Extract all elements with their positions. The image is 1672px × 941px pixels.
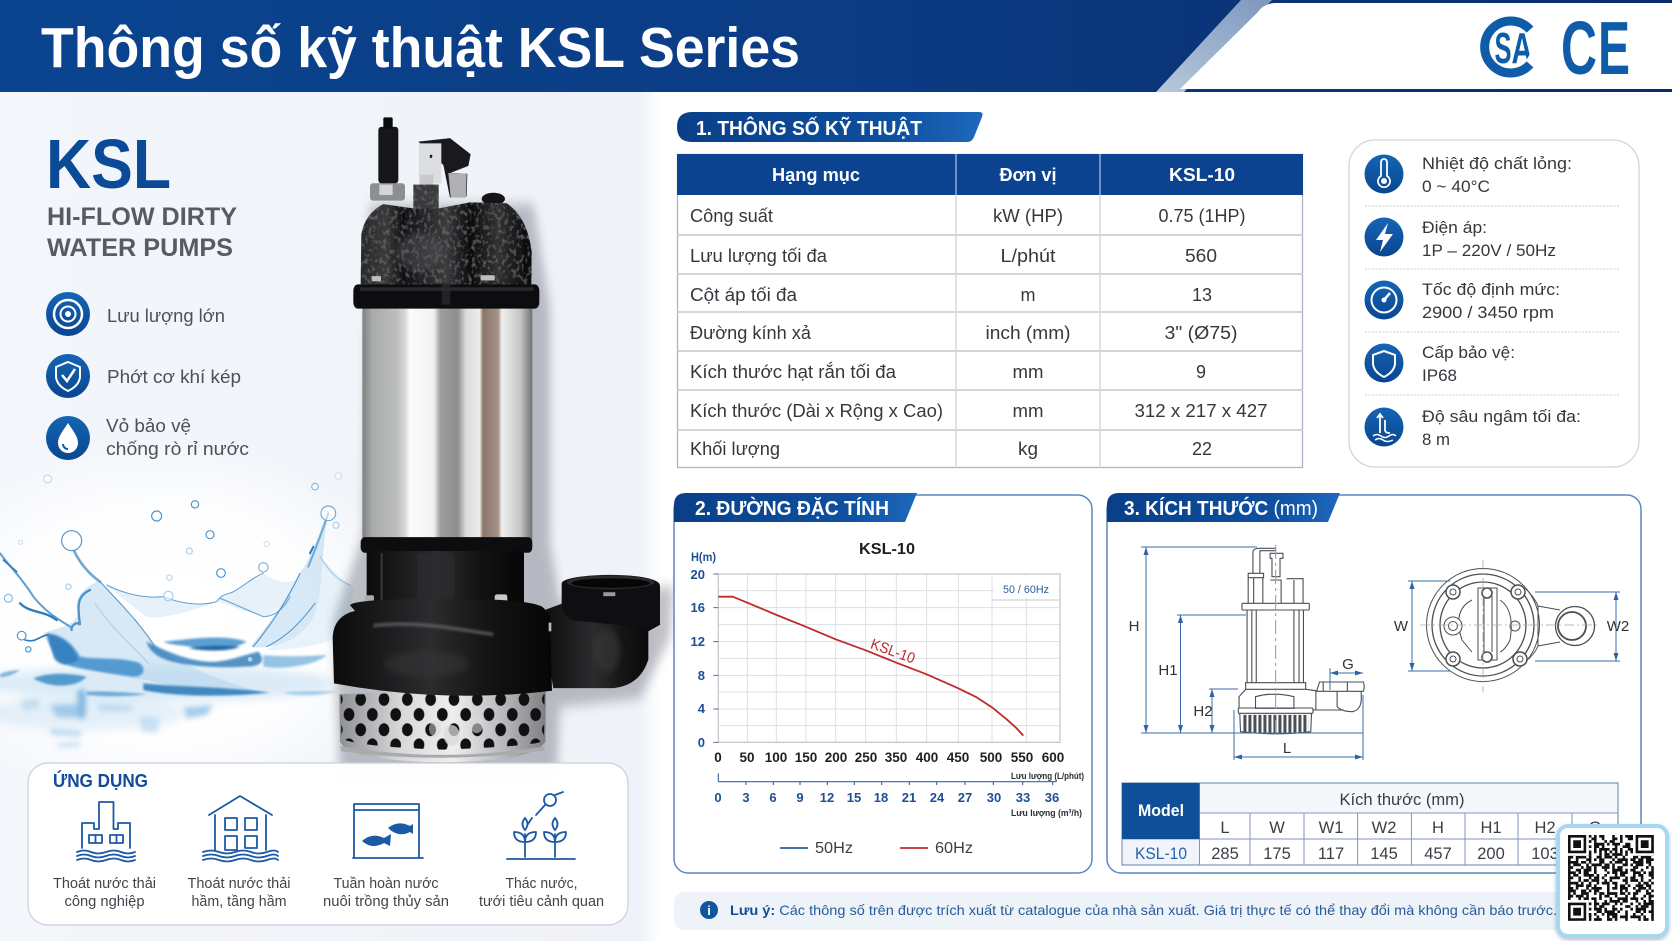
droplets [4, 473, 342, 662]
feature: double mechanical seal [46, 354, 241, 398]
table: dimensions: W1 [1319, 819, 1343, 837]
table rows: L/phút [1000, 246, 1056, 266]
application: industrial wastewater: công nghiệp [64, 893, 144, 910]
panel: applications [28, 763, 628, 925]
product subtitle: WATER PUMPS [47, 234, 233, 262]
pump photo illustration [333, 117, 673, 781]
note bar: Lưu ý: Các thông số trên được trích xuất từ catalogue của nhà sản xuất. Giá trị thực tế có thể thay đổi mà không cần báo trước. [730, 902, 1557, 918]
line chart: head versus flow: 50 [739, 750, 755, 765]
table rows: Công suất [690, 206, 773, 226]
table rows: Đường kính xả [690, 323, 812, 343]
table header [772, 165, 1235, 185]
water reflections [20, 690, 213, 747]
chart legend: 50Hz [815, 840, 853, 857]
line chart: head versus flow [691, 550, 1084, 819]
diagram: side view with dimensions: H1 [1158, 662, 1178, 679]
spec: protection class: IP68 [1422, 366, 1457, 385]
perforated strainer [339, 685, 546, 762]
diagram: side view with dimensions: H2 [1193, 703, 1213, 720]
table header: Hạng mục [772, 165, 860, 185]
table: dimensions: L [1220, 819, 1230, 837]
application: basement drainage: hầm, tầng hầm [192, 893, 286, 910]
table rows: 0.75 (1HP) [1158, 206, 1246, 226]
table rows: Kích thước hạt rắn tối đa [690, 361, 897, 382]
spec: liquid temperature: 0 ~ 40°C [1422, 177, 1490, 196]
table rows: mm [1012, 362, 1044, 382]
line chart: head versus flow: 30 [987, 790, 1001, 805]
application: irrigation and landscape: tưới tiêu cảnh quan [479, 893, 604, 910]
feature: leak-proof casing: chống rò rỉ nước [106, 439, 249, 459]
section 1 heading tab [677, 112, 983, 142]
application: industrial wastewater [53, 802, 156, 910]
table rows: 560 [1185, 246, 1217, 266]
note bar [674, 892, 1584, 930]
table rows: Khối lượng [690, 439, 780, 459]
line chart: head versus flow: 0 [698, 735, 705, 750]
spec: maximum submersion depth: Độ sâu ngâm tối đa: [1422, 407, 1581, 426]
line chart: head versus flow: 24 [930, 790, 945, 805]
line chart: head versus flow: 4 [698, 701, 706, 716]
panel: operating conditions [1349, 140, 1639, 467]
application: irrigation and landscape [479, 792, 604, 910]
line chart: head versus flow: 0 [714, 790, 722, 805]
table rows [690, 206, 1268, 459]
icon: CSA certification mark [1485, 21, 1532, 73]
table: dimensions: H [1432, 819, 1444, 837]
line chart: head versus flow: 3 [742, 790, 750, 805]
icon: CSA certification mark: S [1494, 24, 1512, 73]
section 3 heading tab: 3. KÍCH THƯỚC (mm) [1124, 496, 1318, 520]
QR code card [1558, 826, 1667, 936]
motor dome [361, 193, 532, 286]
line chart: head versus flow: 150 [795, 750, 817, 765]
table: dimensions: W2 [1372, 819, 1396, 837]
line chart: head versus flow: 50 / 60Hz [1003, 584, 1049, 596]
line chart: head versus flow: 550 [1011, 750, 1033, 765]
spec: protection class: Cấp bảo vệ: [1422, 343, 1515, 362]
product subtitle: HI-FLOW DIRTY [47, 203, 237, 231]
line chart: head versus flow: 21 [902, 790, 916, 805]
spec: maximum submersion depth: 8 m [1422, 430, 1450, 449]
line chart: head versus flow: 0 [714, 750, 722, 765]
feature: high flow: Lưu lượng lớn [107, 306, 225, 326]
icon: CE certification mark: C [1561, 6, 1597, 90]
feature: high flow [46, 292, 225, 336]
panel: dimensions [1107, 493, 1641, 873]
table: dimensions [1122, 783, 1618, 865]
table: dimensions: 117 [1318, 845, 1344, 863]
feature: leak-proof casing [46, 416, 249, 460]
table rows: Cột áp tối đa [690, 285, 798, 305]
line chart: head versus flow: 450 [947, 750, 969, 765]
table: dimensions: G [1589, 819, 1601, 837]
spec: voltage: 1P – 220V / 50Hz [1422, 241, 1556, 260]
line chart: head versus flow: Lưu lượng (L/phút) [1011, 771, 1084, 782]
line chart: head versus flow: 9 [796, 790, 804, 805]
line chart: head versus flow: 36 [1045, 790, 1059, 805]
table: dimensions: 457 [1424, 845, 1452, 863]
top flange [353, 282, 539, 309]
feature: double mechanical seal: Phớt cơ khí kép [107, 367, 241, 387]
applications heading: ỨNG DỤNG [53, 770, 148, 791]
application: aquaculture: Tuần hoàn nước [334, 875, 439, 892]
spec: voltage [1364, 218, 1556, 260]
line chart: head versus flow: 350 [885, 750, 907, 765]
steel motor housing [362, 304, 532, 540]
line chart: head versus flow: 400 [916, 750, 938, 765]
diagram: side view with dimensions: G [1342, 656, 1354, 673]
pump volute casing [333, 599, 552, 696]
table: dimensions: 103 [1531, 845, 1559, 863]
line chart: head versus flow: 600 [1042, 750, 1064, 765]
line chart: head versus flow: 500 [980, 750, 1002, 765]
table rows: Kích thước (Dài x Rộng x Cao) [690, 401, 943, 421]
spec: liquid temperature [1364, 154, 1572, 196]
diagram: side view with dimensions [1129, 545, 1364, 760]
chart legend [780, 840, 973, 857]
water splash illustration [0, 435, 425, 815]
table rows: 9 [1196, 362, 1206, 382]
table model header [1122, 783, 1200, 839]
line chart: head versus flow: 27 [958, 790, 972, 805]
spec: liquid temperature: Nhiệt độ chất lỏng: [1422, 154, 1572, 173]
table header: Đơn vị [1000, 165, 1056, 185]
table header: KSL-10 [1169, 165, 1235, 185]
line chart: head versus flow: 12 [820, 790, 834, 805]
application: aquaculture [323, 804, 449, 910]
title: Thông số kỹ thuật KSL Series [41, 16, 800, 80]
diagram: top view with dimensions [1394, 560, 1629, 692]
line chart: head versus flow: 250 [855, 750, 877, 765]
line chart: head versus flow: 100 [765, 750, 787, 765]
spec: voltage: Điện áp: [1422, 218, 1487, 237]
section 2 heading tab [674, 493, 917, 522]
deep blue water [0, 633, 337, 696]
table: dimensions: Kích thước (mm) [1340, 791, 1464, 809]
application: basement drainage [188, 796, 290, 910]
table rows: m [1020, 285, 1036, 305]
line chart: head versus flow: 16 [691, 600, 705, 615]
table: dimensions: KSL-10 [1135, 845, 1187, 863]
line chart: head versus flow: 33 [1016, 790, 1030, 805]
table rows: 3" (Ø75) [1164, 323, 1238, 343]
spec: rated speed [1364, 280, 1560, 322]
line chart: head versus flow: 20 [691, 567, 705, 582]
line chart: head versus flow: KSL-10 [868, 636, 917, 667]
section 2 heading tab: 2. ĐƯỜNG ĐẶC TÍNH [695, 496, 889, 520]
diagram: side view with dimensions: L [1283, 740, 1291, 757]
table: dimensions: 145 [1370, 845, 1398, 863]
application: industrial wastewater: Thoát nước thải [53, 875, 156, 892]
handle bracket [413, 138, 471, 214]
table rows: 22 [1192, 439, 1212, 459]
table rows: kg [1018, 439, 1038, 459]
water sheet [43, 580, 267, 693]
table rows: 13 [1192, 285, 1212, 305]
table rows: Lưu lượng tối đa [690, 246, 828, 266]
diagram: top view with dimensions: W2 [1607, 618, 1629, 635]
lower ring and neck [361, 537, 532, 605]
line chart: head versus flow: 18 [874, 790, 888, 805]
panel: performance curve [674, 493, 1092, 873]
icon: CE certification mark: E [1598, 6, 1630, 90]
application: basement drainage: Thoát nước thải [188, 875, 290, 892]
brand name: KSL [46, 125, 171, 203]
diagram: top view with dimensions: W [1394, 618, 1409, 635]
table: dimensions: W [1269, 819, 1285, 837]
table: dimensions: 285 [1211, 845, 1239, 863]
table: dimensions: 200 [1477, 845, 1505, 863]
table: dimensions: H2 [1534, 819, 1556, 837]
table: dimensions: H1 [1480, 819, 1502, 837]
line chart: head versus flow: H(m) [691, 550, 716, 564]
spec: rated speed: 2900 / 3450 rpm [1422, 303, 1554, 322]
spec: maximum submersion depth [1364, 407, 1581, 449]
table rows: 312 x 217 x 427 [1134, 401, 1268, 421]
application: aquaculture: nuôi trồng thủy sản [323, 893, 449, 910]
chart legend: 60Hz [935, 840, 973, 857]
table model header: Model [1138, 801, 1184, 820]
line chart: head versus flow: 15 [847, 790, 861, 805]
line chart: head versus flow: 6 [769, 790, 777, 805]
line chart: head versus flow: 12 [691, 634, 705, 649]
table rows: mm [1012, 401, 1044, 421]
discharge elbow [540, 575, 660, 688]
splash strands [0, 513, 350, 663]
panel: specification table [677, 154, 1303, 468]
table rows: inch (mm) [986, 323, 1070, 343]
line chart: head versus flow: 200 [825, 750, 847, 765]
left panel background [0, 92, 660, 941]
section 3 heading tab [1107, 493, 1340, 522]
chart title: KSL-10 [859, 541, 915, 558]
application: irrigation and landscape: Thác nước, [506, 875, 578, 892]
diagram: side view with dimensions: H [1129, 618, 1139, 635]
section 1 heading tab: 1. THÔNG SỐ KỸ THUẬT [696, 116, 922, 140]
icon: info: i [707, 903, 711, 918]
spec: rated speed: Tốc độ định mức: [1422, 280, 1560, 299]
spec: protection class [1364, 343, 1515, 385]
icon: info [700, 901, 718, 919]
icon: CSA certification mark: A [1512, 24, 1532, 73]
product subtitle [47, 203, 237, 262]
header band [0, 0, 1672, 92]
pump shadow [333, 204, 673, 781]
line chart: head versus flow: Lưu lượng (m³/h) [1011, 808, 1082, 819]
feature list [46, 292, 249, 460]
cable gland [370, 117, 405, 201]
line chart: head versus flow: 8 [698, 668, 705, 683]
feature: leak-proof casing: Vỏ bảo vệ [106, 416, 191, 436]
table rows: kW (HP) [993, 206, 1063, 226]
table: dimensions: 175 [1263, 845, 1291, 863]
